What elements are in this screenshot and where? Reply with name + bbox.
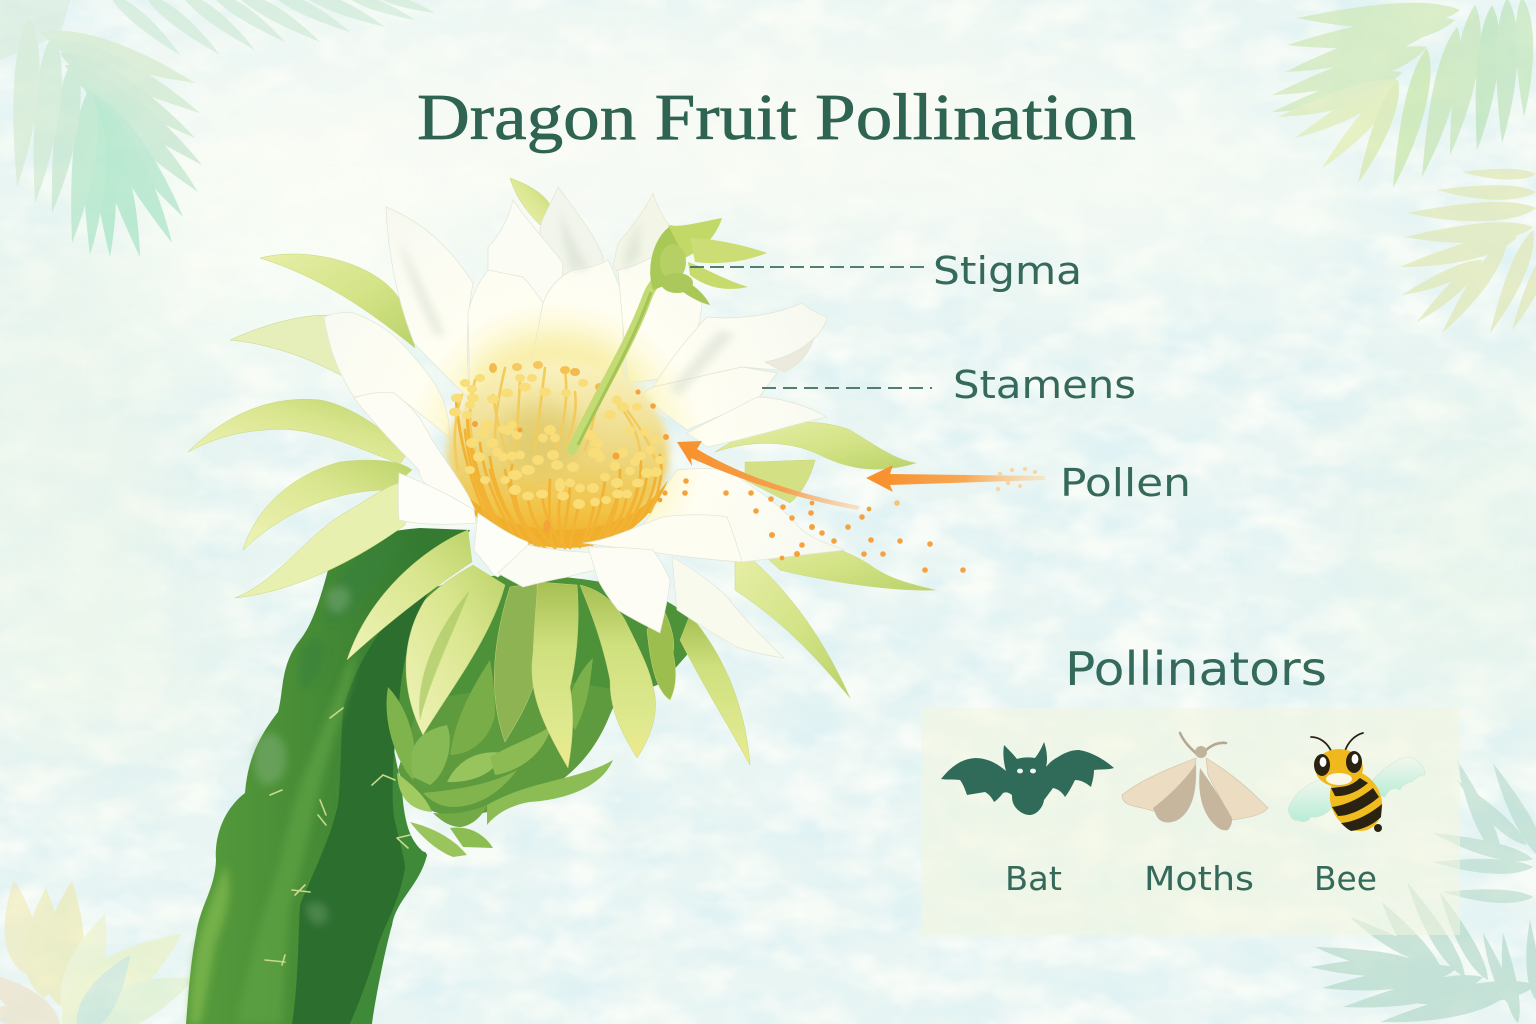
palm frond: bottom right lower [1310, 879, 1536, 1024]
icon: bee [1288, 733, 1425, 840]
cactus stem [186, 528, 470, 1024]
back petals [324, 187, 827, 447]
palm frond: top left [0, 0, 211, 260]
label: Stigma: Stigma [933, 249, 1082, 293]
label: Stamens: Stamens [953, 363, 1136, 407]
yellow throat [470, 335, 640, 455]
pistil [572, 218, 767, 450]
right petals [640, 468, 845, 562]
arrow: pollen to stamens [677, 441, 860, 510]
stigma head [650, 218, 767, 305]
filaments [456, 400, 661, 548]
flower [188, 178, 935, 768]
title: Dragon Fruit Pollination [417, 81, 1136, 154]
palm frond: top right [1269, 0, 1534, 191]
front petals [354, 393, 784, 658]
petal shading [400, 210, 735, 395]
palm frond: right [1398, 168, 1536, 339]
anthers [449, 361, 665, 509]
dark groove [292, 590, 440, 1024]
label: Moths: Moths [1144, 859, 1254, 898]
palm frond: top centre [106, 0, 437, 60]
pollen dots [635, 389, 1037, 573]
heading: Pollinators [1065, 642, 1327, 696]
flower bud [387, 658, 618, 857]
icon: bat [941, 742, 1114, 815]
right rib [350, 750, 427, 1024]
icon: moth [1122, 733, 1268, 830]
orange accents [472, 421, 620, 532]
stamen disk [447, 361, 669, 548]
label: Pollen: Pollen [1060, 461, 1191, 505]
arrow: label to flower [866, 465, 1045, 492]
cactus plant [186, 528, 700, 1024]
label: Bee: Bee [1314, 859, 1377, 898]
outer sepals [188, 178, 935, 768]
panel: pollinators [921, 642, 1460, 935]
rib shading [190, 540, 405, 1024]
palm frond: bottom left [0, 878, 202, 1024]
panel background [921, 708, 1460, 935]
calyx base [398, 575, 700, 800]
filament base [452, 480, 668, 548]
spines [265, 708, 410, 965]
palm frond: bottom right upper [1431, 757, 1536, 905]
label: Bat: Bat [1005, 859, 1062, 898]
